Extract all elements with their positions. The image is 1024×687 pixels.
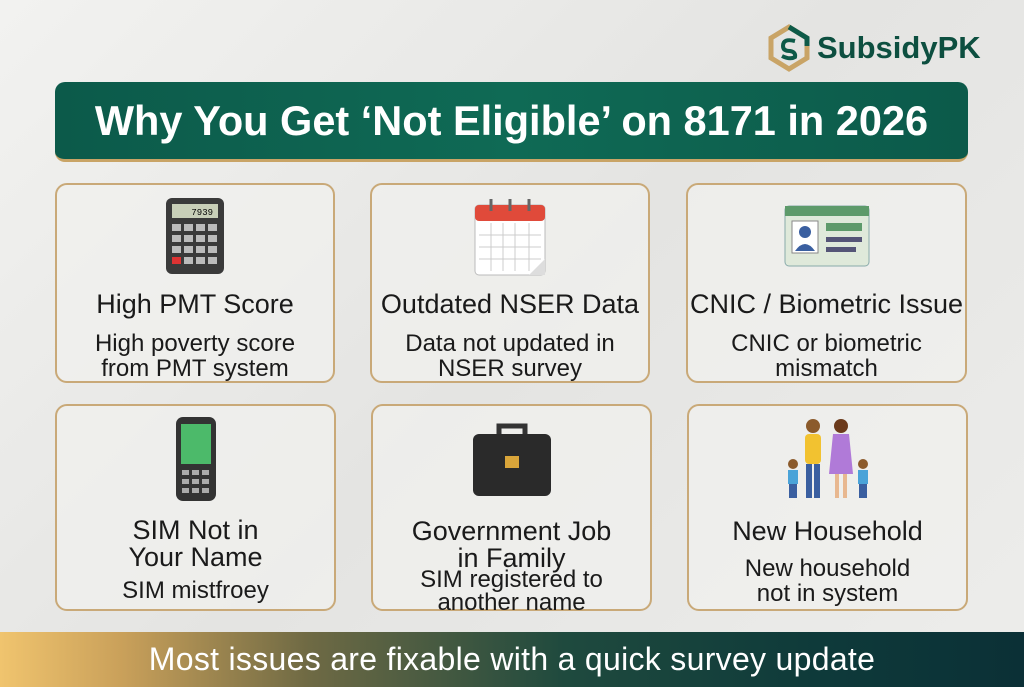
panel: SIM not in your name: SIM Not in xyxy=(132,515,259,545)
panel: outdated NSER data: Outdated NSER Data xyxy=(381,289,639,319)
panel: outdated NSER data xyxy=(370,183,650,383)
logo xyxy=(768,24,981,72)
panel: outdated NSER data: Data not updated in xyxy=(405,330,615,357)
title bar: Why You Get ‘Not Eligible’ on 8171 in 2026 xyxy=(95,97,928,144)
panel: new household: not in system xyxy=(757,580,898,607)
panel: outdated NSER data: NSER survey xyxy=(438,355,582,382)
icon: phone xyxy=(176,417,216,501)
icon: briefcase xyxy=(473,424,551,496)
panel: government job in family: Government Job xyxy=(412,516,611,546)
panel: government job in family: another name xyxy=(437,589,586,616)
panel: government job in family: in Family xyxy=(457,543,566,573)
panel: high PMT score: High PMT Score xyxy=(96,289,294,319)
panel: CNIC biometric issue: CNIC or biometric xyxy=(731,330,922,357)
panel: CNIC biometric issue xyxy=(686,183,967,383)
panel: government job in family: SIM registered to xyxy=(420,566,603,593)
panel: CNIC biometric issue: mismatch xyxy=(775,355,878,382)
panel: high PMT score: High poverty score xyxy=(95,330,295,357)
icon: family xyxy=(788,419,868,498)
icon: logo shield xyxy=(768,24,810,72)
title bar xyxy=(55,82,968,162)
footer banner xyxy=(0,632,1024,687)
panel: SIM not in your name: SIM mistfroey xyxy=(122,577,269,604)
footer banner: Most issues are fixable with a quick survey update xyxy=(149,641,875,677)
panel: new household: New Household xyxy=(732,516,923,546)
panel: government job in family xyxy=(371,404,652,611)
panel: SIM not in your name xyxy=(55,404,336,611)
panel: CNIC biometric issue: CNIC / Biometric Issue xyxy=(690,289,963,319)
panel: SIM not in your name: Your Name xyxy=(128,542,263,572)
icon: calculator: 7939 xyxy=(191,208,213,218)
logo: SubsidyPK xyxy=(817,30,981,65)
icon: ID card xyxy=(784,206,870,266)
panel: new household: New household xyxy=(745,555,910,582)
panel: high PMT score xyxy=(55,183,335,383)
icon: calendar xyxy=(474,199,546,276)
icon: calculator xyxy=(166,198,224,274)
panel: new household xyxy=(687,404,968,611)
panel: high PMT score: from PMT system xyxy=(101,355,289,382)
